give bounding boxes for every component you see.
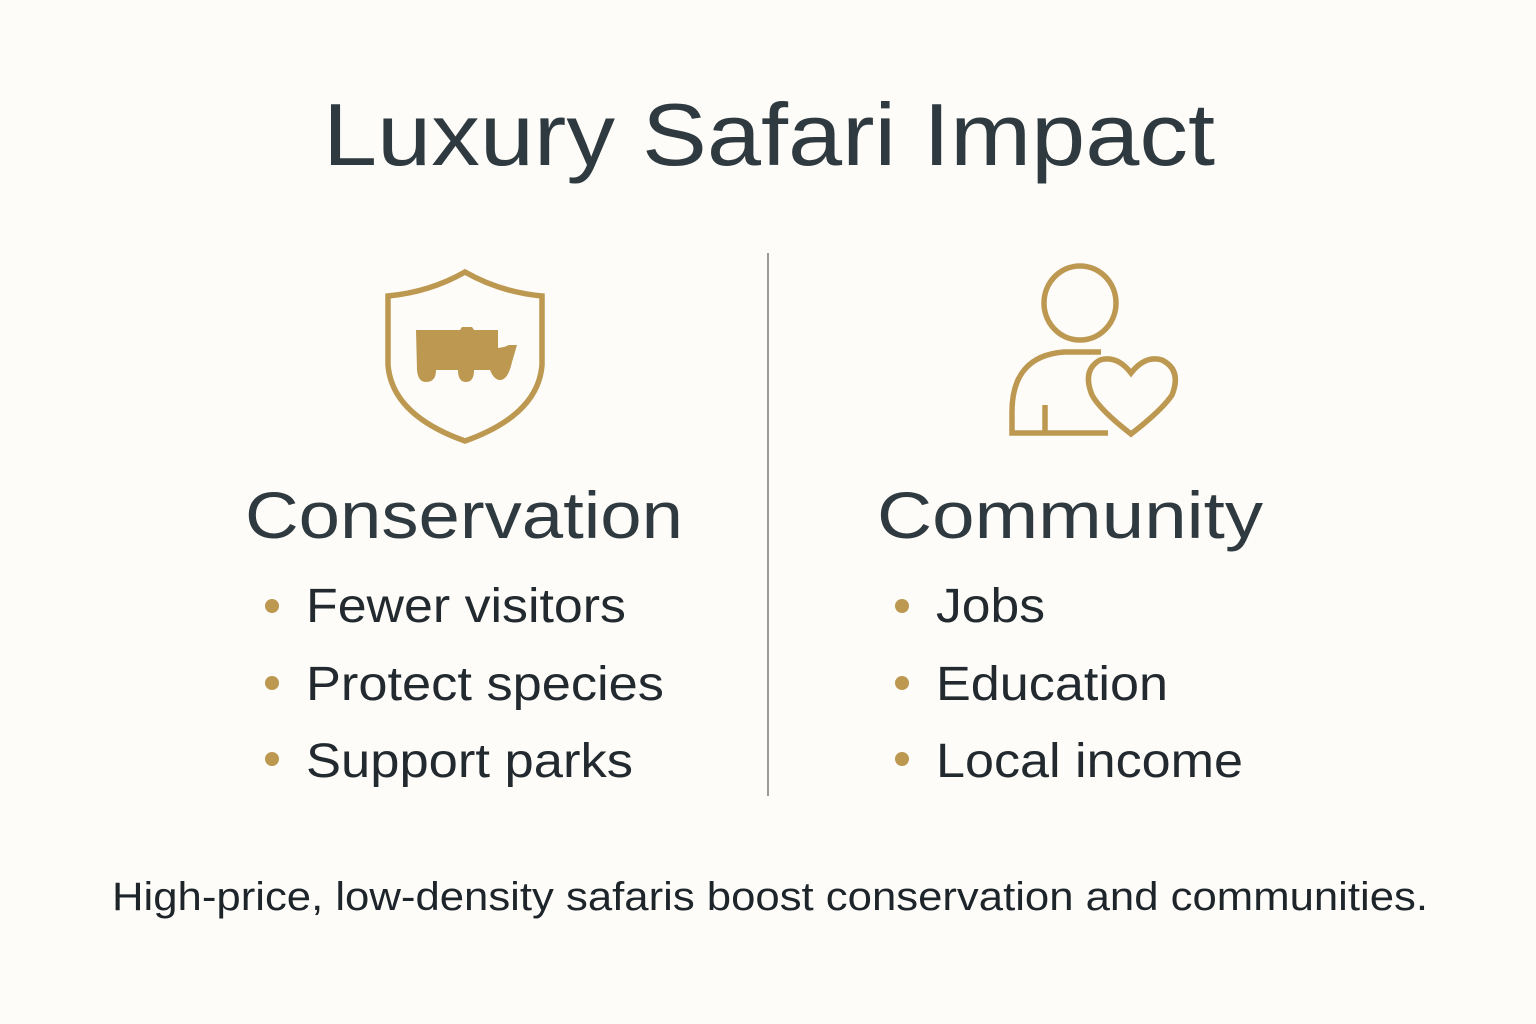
heading: Conservation: Conservation — [245, 478, 683, 552]
list: conservation bullets: Support parks — [306, 735, 633, 788]
list: conservation bullets: Protect species — [306, 658, 664, 711]
list: community bullets: Local income — [936, 735, 1243, 788]
list: community bullets: Jobs — [936, 580, 1045, 633]
panel: conservation — [245, 272, 683, 788]
icon: shield with safari vehicle — [388, 272, 542, 441]
panel: community — [877, 266, 1263, 788]
list: conservation bullets: Fewer visitors — [306, 580, 626, 633]
icon: person with heart — [1012, 266, 1175, 434]
list: conservation bullets — [265, 580, 664, 788]
heading: Community: Community — [877, 478, 1263, 552]
list: community bullets: Education — [936, 658, 1168, 711]
list: community bullets — [895, 580, 1243, 788]
footer caption: High-price, low-density safaris boost conservation and communities. — [112, 875, 1428, 919]
title: Luxury Safari Impact — [323, 85, 1215, 184]
